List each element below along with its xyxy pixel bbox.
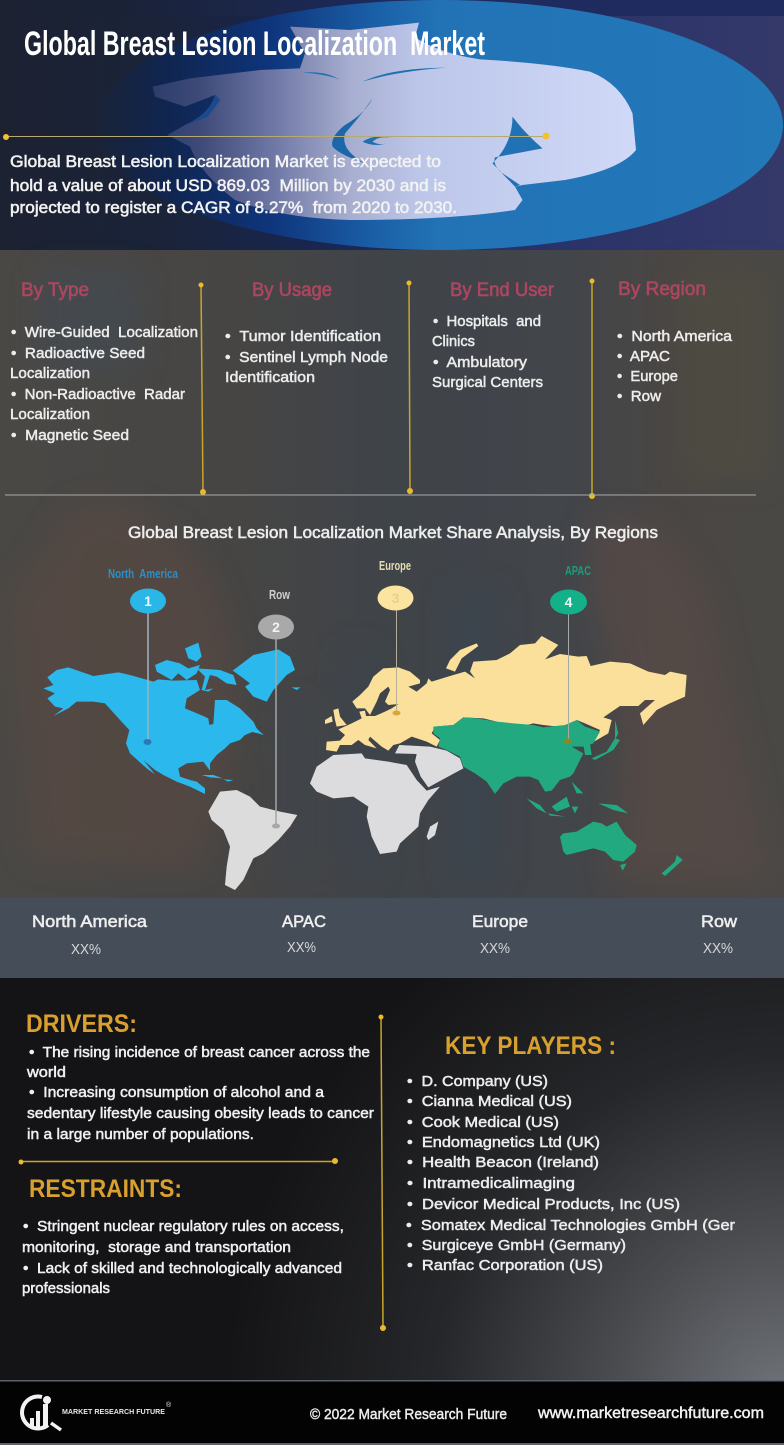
column: by usage: • Sentinel Lymph Node [225,349,388,366]
drivers: DRIVERS: [26,1010,137,1038]
drivers: • The rising incidence of breast cancer across the [29,1044,370,1061]
marker 4: apac: APAC [565,563,591,578]
column: by type: By Type [21,280,89,301]
map region: asia pacific [433,717,683,876]
column: by end user: • Hospitals and [433,313,541,330]
column: by region: • Europe [617,368,678,385]
drivers: world [26,1064,66,1081]
map region: south america [208,790,297,890]
key players: • Cianna Medical (US) [407,1093,572,1110]
column: by type: • Wire-Guided Localization [11,324,198,341]
map region: africa and middle east [310,745,463,854]
decorative yellow rule [3,132,550,140]
key players: • D. Company (US) [407,1073,548,1090]
marker 2: row: Row [269,587,291,602]
panel: regional share strip: XX% [703,940,733,957]
column: by type: Localization [10,365,90,382]
heading: share analysis: Global Breast Lesion Localization Market Share Analysis, By Regions [128,524,658,542]
marker 3: europe [378,558,414,716]
marker 2: row [258,587,294,828]
column: by region: • Row [617,388,661,405]
brand name: MARKET RESEARCH FUTURE [62,1407,165,1416]
column: by usage [225,280,388,386]
column: by type: • Radioactive Seed [11,345,145,362]
column: by region: • APAC [617,348,670,365]
panel: footer [0,1380,784,1445]
icon: logo [22,1396,61,1430]
column: by end user: Surgical Centers [432,374,543,391]
panel: regional share strip: APAC [282,912,326,931]
column: by type [10,280,198,444]
column: by type: Localization [10,406,90,423]
marker 4: apac [550,563,591,744]
panel: regional share strip: XX% [287,939,316,956]
column: by region: By Region [618,279,706,300]
drivers: • Increasing consumption of alcohol and a [29,1084,325,1101]
column: by end user [432,280,555,391]
registered mark: ® [166,1401,172,1409]
restraints: RESTRAINTS: [29,1175,182,1203]
key players: • Endomagnetics Ltd (UK) [407,1134,600,1151]
marker 4: apac: 4 [565,594,573,610]
map region: north america [43,643,301,794]
drivers: sedentary lifestyle causing obesity leads to cancer [27,1105,374,1122]
column: by region [617,279,733,405]
marker 3: europe: 3 [392,590,400,606]
map region: europe and russia [325,636,687,752]
panel: regional share strip [0,898,784,978]
section rule [18,1014,386,1331]
drivers [26,1010,374,1143]
restraints [22,1175,344,1297]
key players: • Intramedicalimaging [407,1175,575,1192]
key players: • Somatex Medical Technologies GmbH (Ger [406,1217,735,1234]
key players: • Devicor Medical Products, Inc (US) [407,1196,680,1213]
marker 1: north america: North America [108,566,179,581]
website: www.marketresearchfuture.com [537,1405,764,1422]
key players: • Cook Medical (US) [407,1114,559,1131]
panel: regional share strip: Row [701,912,738,931]
intro paragraph: hold a value of about USD 869.03 Million by 2030 and is [10,177,446,195]
key players: KEY PLAYERS : [445,1032,616,1060]
panel: regional share strip: XX% [71,941,101,958]
column: by usage: • Tumor Identification [225,328,381,345]
key players: • Health Beacon (Ireland) [407,1154,599,1171]
intro paragraph: Global Breast Lesion Localization Market is expected to [10,153,441,171]
intro paragraph: projected to register a CAGR of 8.27% from 2020 to 2030. [10,199,457,217]
intro paragraph [10,153,457,217]
marker 1: north america: 1 [144,593,152,609]
panel: regional share strip: XX% [480,940,510,957]
panel: drivers, restraints and key players [0,978,784,1381]
column: by end user: Clinics [432,333,475,350]
drivers: in a large number of populations. [27,1126,254,1143]
marker 2: row: 2 [272,619,280,635]
copyright: © 2022 Market Research Future [310,1407,507,1423]
panel: header banner [0,0,784,250]
column: by region: • North America [617,328,733,345]
restraints: monitoring, storage and transportation [22,1239,291,1256]
column: by type: • Non-Radioactive Radar [11,386,185,403]
column dividers [198,278,595,499]
column: by end user: • Ambulatory [433,354,528,371]
panel: regional share strip: North America [32,912,148,931]
panel: market segments [5,278,756,499]
key players [406,1032,735,1274]
panel: photo backdrop for segments and map [0,250,784,898]
column: by end user: By End User [450,280,555,301]
column: by usage: By Usage [252,280,332,301]
column: by usage: Identification [225,369,315,386]
restraints: professionals [22,1280,110,1297]
restraints: • Stringent nuclear regulatory rules on access, [23,1218,344,1235]
key players: • Ranfac Corporation (US) [407,1257,603,1274]
restraints: • Lack of skilled and technologically advanced [23,1260,342,1277]
marker 3: europe: Europe [379,558,411,573]
key players: • Surgiceye GmbH (Germany) [407,1237,626,1254]
panel: regional share strip: Europe [472,912,528,931]
column: by type: • Magnetic Seed [11,427,129,444]
illustration: breast silhouette [152,23,636,220]
title: Global Breast Lesion Localization Market [24,25,485,63]
marker 1: north america [108,566,179,745]
chart: world map [43,558,687,890]
